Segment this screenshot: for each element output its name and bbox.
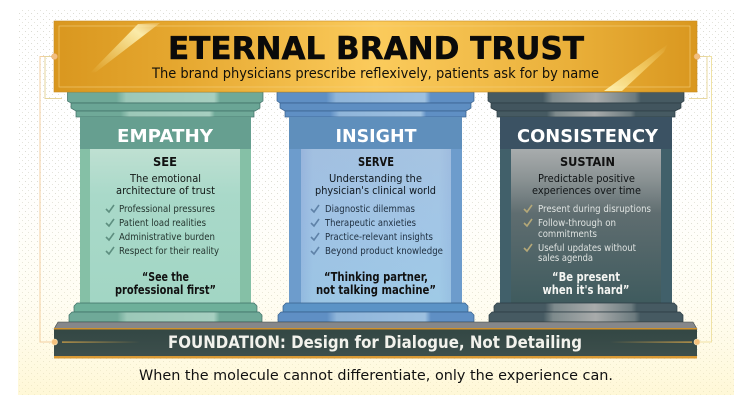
subtitle: The brand physicians prescribe reflexively, patients ask for by name [151,66,599,82]
gold trim: top [54,328,697,330]
heading: consistency: CONSISTENCY [517,126,659,147]
pillar shaft [500,117,672,303]
pillar: insight [277,92,474,322]
quote: professional first” [115,283,216,297]
connector node: bottom right [694,339,700,345]
checklist: Present during disruptions [538,204,651,215]
description [315,172,436,197]
quote: “See the [142,270,189,284]
description: experiences over time [532,184,641,197]
checklist [324,204,443,257]
check icons [106,205,114,254]
inner panel [301,149,451,303]
description: The emotional [129,172,201,185]
quote [115,270,216,297]
pillar base [278,303,474,322]
pillar capital [277,92,474,117]
column header band [80,117,251,149]
quote [316,270,436,297]
column header band [289,117,462,149]
quote [542,270,630,297]
pillar shaft [80,117,251,303]
accent rule: left [62,342,140,343]
accent rule: right [610,342,692,343]
subheading: serve: SERVE [358,154,394,169]
checklist: sales agenda [538,253,593,264]
title: ETERNAL BRAND TRUST [168,31,584,67]
foundation text: FOUNDATION: Design for Dialogue, Not Detailing [168,333,582,352]
dark band [54,329,697,358]
description: architecture of trust [116,184,216,197]
check icons [311,205,319,254]
gold trim: bottom [54,356,697,358]
description [532,172,641,197]
quote: not talking machine” [316,283,436,297]
title banner [54,21,697,92]
checklist: Therapeutic anxieties [324,218,416,229]
pillar capital [68,92,263,117]
inner panel [90,149,240,303]
checklist: Respect for their reality [119,246,219,257]
plinth top edge [54,322,697,329]
pillar shaft [289,117,462,303]
checklist: Professional pressures [119,204,215,215]
light glint: right [604,44,668,91]
subheading: see: SEE [153,154,177,169]
checklist: Follow-through on [538,218,616,229]
description [116,172,216,197]
connector node: top left [52,54,58,60]
heading: empathy: EMPATHY [117,126,214,147]
checklist: commitments [538,229,597,240]
checklist: Beyond product knowledge [325,246,443,257]
subheading: sustain: SUSTAIN [560,154,615,169]
check icons [524,205,532,251]
pillar: consistency [488,92,684,322]
pillar base [489,303,683,322]
quote: when it's hard” [542,283,630,297]
foundation bar [54,322,697,358]
quote: “Thinking partner, [324,270,428,284]
checklist: Practice-relevant insights [325,232,433,243]
inner panel side tint [301,149,451,303]
connector lines: right [689,56,712,342]
pillar: empathy [68,92,263,322]
connector node: bottom left [52,339,58,345]
gold plate [54,21,697,92]
checklist [119,204,219,257]
light glint: left [90,23,160,73]
description: physician's clinical world [315,184,436,197]
inner panel [511,149,661,303]
quote: “Be present [552,270,620,284]
checklist: Useful updates without [538,243,636,254]
tagline: When the molecule cannot differentiate, only the experience can. [139,368,613,384]
pillar base [69,303,262,322]
inner keyline [59,26,690,87]
column header band [500,117,672,149]
checklist: Administrative burden [119,232,215,243]
connector node: top right [694,54,700,60]
description: Understanding the [329,172,422,185]
heading: insight: INSIGHT [336,126,417,147]
pillar capital [488,92,684,117]
checklist [538,204,651,264]
checklist: Patient load realities [119,218,206,229]
connector lines: left [40,56,62,342]
description: Predictable positive [538,172,635,185]
checklist: Diagnostic dilemmas [325,204,415,215]
